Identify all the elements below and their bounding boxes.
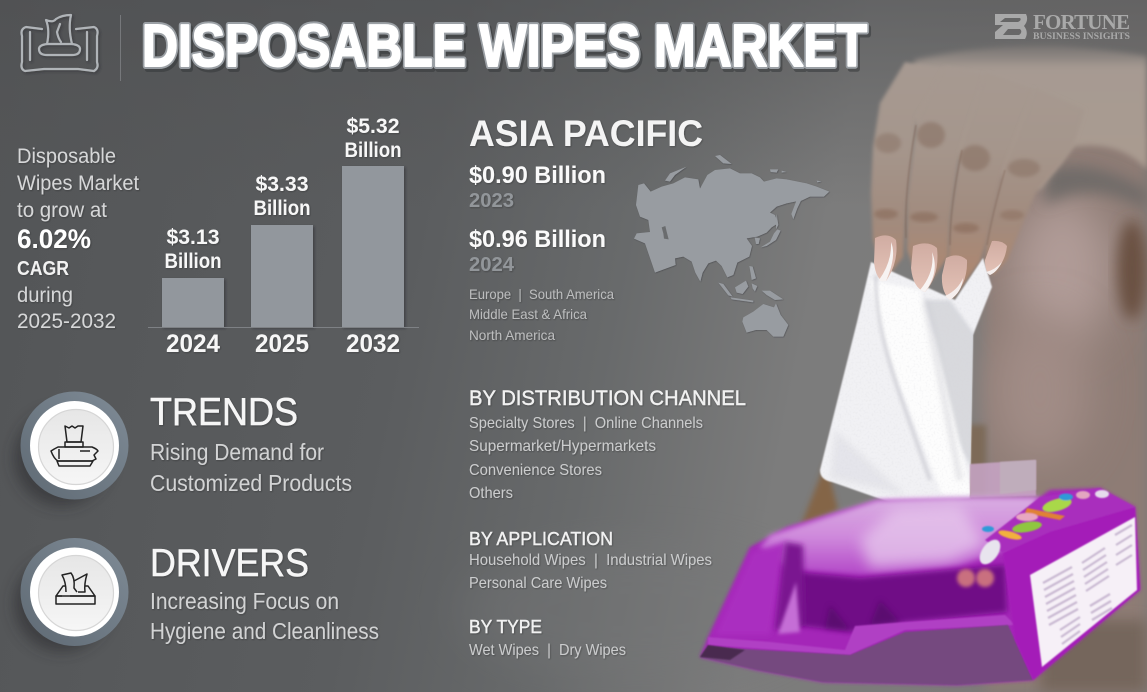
drivers text [150, 542, 379, 644]
by distribution channel [469, 387, 746, 502]
CAGR text block: CAGR [17, 258, 69, 280]
CAGR text block: 6.02% [17, 224, 91, 254]
regional block: Asia Pacific: Middle East & Africa [469, 306, 587, 322]
regional block: Asia Pacific: 2023 [469, 190, 514, 212]
trends text: Customized Products [150, 470, 352, 496]
photo: wipes package [700, 460, 1140, 685]
regional block: Asia Pacific: North America [469, 327, 555, 343]
icon: wipes packet [51, 426, 98, 466]
bar chart: Billion [254, 197, 310, 220]
regional block: Asia Pacific [469, 113, 703, 343]
by distribution channel: Others [469, 485, 513, 502]
back of hand [900, 46, 1147, 190]
photo: wipe [815, 255, 995, 510]
trends text: TRENDS [150, 391, 298, 434]
bar chart: Billion [164, 250, 222, 273]
by application: Personal Care Wipes [469, 575, 607, 592]
package label [1030, 517, 1137, 667]
photo: hand [871, 46, 1147, 300]
title: DISPOSABLE WIPES MARKET [144, 16, 869, 82]
CAGR text block: 2025-2032 [17, 310, 116, 333]
drivers text: Increasing Focus on [150, 588, 339, 614]
by type: BY TYPE [469, 616, 542, 637]
logo: Fortune Business Insights [995, 10, 1130, 42]
drivers text: Hygiene and Cleanliness [150, 618, 379, 644]
segment lists [469, 387, 746, 659]
regional block: Asia Pacific: ASIA PACIFIC [469, 113, 703, 154]
regional block: Asia Pacific: Europe | South America [469, 286, 614, 302]
by application: BY APPLICATION [469, 528, 613, 549]
by distribution channel: Specialty Stores | Online Channels [469, 415, 703, 432]
drivers badge icon [14, 538, 128, 652]
logo: Fortune Business Insights: FORTUNE [1033, 10, 1130, 34]
bar chart: 2032 [346, 330, 400, 358]
regional block: Asia Pacific: $0.96 Billion [469, 226, 606, 253]
trends badge icon [14, 392, 128, 506]
bar chart: $5.32 [346, 115, 400, 138]
trends text: Rising Demand for [150, 439, 324, 465]
CAGR text block: to grow at [17, 199, 107, 222]
divider [120, 15, 121, 81]
map: Asia Pacific [634, 155, 829, 337]
bar chart: 2025 [255, 330, 309, 358]
bar chart [148, 115, 419, 358]
package colourful logo [982, 490, 1109, 541]
by application [469, 528, 712, 592]
title: DISPOSABLE WIPES MARKET [142, 13, 867, 79]
title icon [21, 15, 98, 71]
trends text [150, 391, 352, 496]
photo: blurred background behind hand [800, 130, 1147, 692]
by distribution channel: Convenience Stores [469, 462, 602, 479]
by distribution channel: BY DISTRIBUTION CHANNEL [469, 387, 746, 410]
photo: nails [874, 235, 1007, 300]
bar chart: $3.13 [166, 226, 220, 249]
fingers [871, 62, 945, 280]
CAGR text block: during [17, 284, 73, 307]
bar chart: $3.33 [256, 173, 308, 196]
regional block: Asia Pacific: $0.90 Billion [469, 162, 606, 189]
CAGR text block: Wipes Market [17, 172, 139, 195]
logo: Fortune Business Insights: BUSINESS INSIGHTS [1033, 32, 1130, 42]
by distribution channel: Supermarket/Hypermarkets [469, 438, 656, 455]
icon: tissue box [56, 573, 95, 604]
by application: Household Wipes | Industrial Wipes [469, 552, 712, 569]
bar chart: Billion [344, 139, 402, 162]
title: DISPOSABLE WIPES MARKET [142, 13, 867, 79]
drivers text: DRIVERS [150, 542, 309, 585]
regional block: Asia Pacific: 2024 [469, 254, 515, 276]
bar chart: 2024 [166, 330, 220, 358]
CAGR text block [17, 145, 139, 333]
by type: Wet Wipes | Dry Wipes [469, 642, 626, 659]
CAGR text block: Disposable [17, 145, 116, 168]
by type [469, 616, 626, 659]
